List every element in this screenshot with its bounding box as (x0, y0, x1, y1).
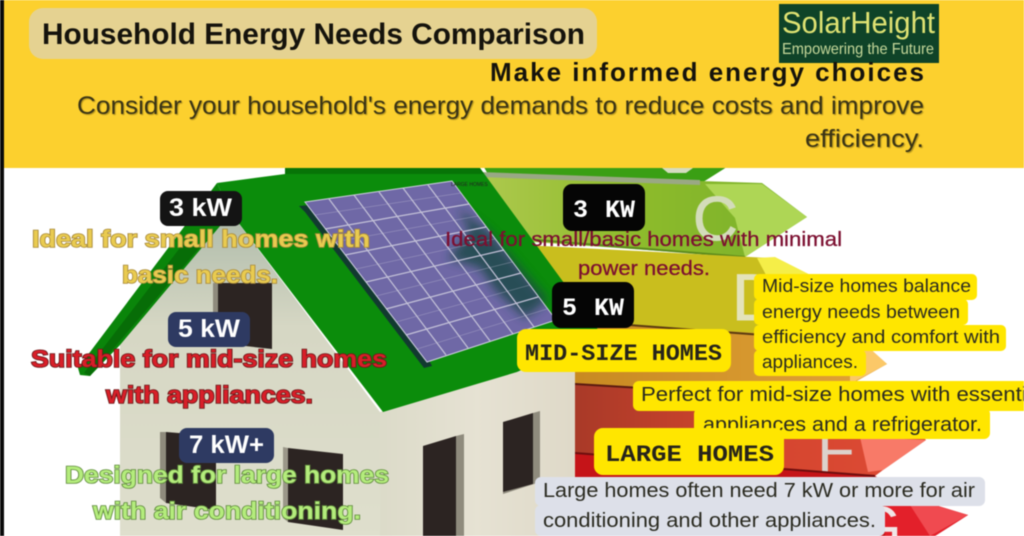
text: large homes: with air conditioning. (92, 498, 361, 525)
text: small/basic homes (445, 229, 842, 280)
badge: 3 kW (160, 191, 242, 226)
left black edge (0, 0, 4, 536)
side window (503, 411, 540, 494)
arrow F red-orange (575, 384, 926, 486)
energy rating arrows (480, 160, 968, 536)
left roof slope (78, 183, 231, 376)
lower left window (160, 432, 216, 510)
badge: 3 KW right (563, 184, 645, 231)
badge: 5 kW: 5 kW (178, 315, 240, 343)
arrow G red (575, 453, 968, 536)
callout: mid-size balance: efficiency and comfort with (762, 327, 1000, 347)
arrow B dark green (480, 160, 738, 184)
callout: mid-size balance: appliances. (762, 352, 858, 372)
callout: essential appliances: Perfect for mid-size homes with essential (641, 383, 1024, 406)
arrow D yellow (505, 244, 850, 337)
header description: Consider your household's energy demands to reduce costs and improve (77, 92, 924, 120)
block: 5 kW left (31, 312, 387, 409)
text: small/basic homes: power needs. (578, 258, 710, 280)
title (29, 8, 597, 59)
badge: 5 KW right (552, 282, 634, 328)
arrow C green: C (693, 185, 738, 254)
arrow D yellow: D (732, 260, 780, 334)
label: large homes (594, 428, 784, 475)
logo: Empowering the Future (782, 41, 934, 58)
panel reflection (448, 208, 548, 318)
callout: large homes need: Large homes often need 7 kW or more for air (543, 479, 975, 502)
tiny panel label: LARGE HOMES (451, 182, 488, 188)
callout: large homes need (535, 477, 985, 536)
text: mid-size homes (31, 346, 387, 409)
block: 3 kW left (32, 191, 370, 289)
header description: efficiency. (805, 125, 924, 153)
house illustration (78, 168, 602, 536)
arrow F red-orange: F (817, 417, 855, 486)
logo: SolarHeight (782, 5, 935, 40)
header band (0, 0, 1024, 168)
arrow C green (480, 172, 807, 257)
callout: mid-size balance (754, 274, 1006, 376)
text: mid-size homes: Suitable for mid-size homes (31, 346, 387, 373)
callout: mid-size balance: energy needs between (762, 302, 960, 322)
text: small/basic homes: Ideal for small/basic homes with minimal (445, 229, 842, 251)
badge: 7 kW+: 7 kW+ (189, 431, 264, 459)
label: mid-size homes: MID-SIZE HOMES (525, 341, 722, 367)
arrow E orange (575, 321, 887, 400)
text: large homes: Designed for large homes (65, 462, 389, 489)
solar panel (299, 181, 556, 368)
badge: 3 KW right: KW (605, 196, 635, 225)
side wall (380, 352, 575, 536)
top window (213, 283, 272, 349)
front wall (120, 213, 380, 536)
callout: mid-size balance: Mid-size homes balance (762, 276, 971, 296)
subheading: Make informed energy choices (490, 57, 924, 87)
text: small homes (32, 226, 370, 289)
text: large homes (65, 462, 389, 525)
badge: 7 kW+ (179, 428, 274, 463)
block: 7 kW left (65, 428, 389, 525)
badge: 3 kW: 3 kW (169, 194, 232, 222)
callout: essential appliances (633, 381, 1024, 439)
lower right window (283, 447, 343, 530)
text: small homes: Ideal for small homes with (32, 226, 370, 253)
label: large homes: LARGE HOMES (605, 442, 774, 468)
badge: 5 KW right: KW (594, 294, 624, 323)
badge: 3 KW right: 3 (573, 196, 588, 225)
callout: large homes need: conditioning and other appliances. (543, 509, 876, 532)
label: mid-size homes (517, 329, 731, 372)
main roof (217, 168, 602, 412)
text: small homes: basic needs. (122, 262, 278, 289)
text: mid-size homes: with appliances. (105, 382, 313, 409)
header description (77, 92, 924, 153)
door (423, 434, 464, 536)
logo (779, 4, 939, 63)
badge: 5 KW right: 5 (562, 294, 577, 323)
title: Household Energy Needs Comparison (42, 18, 585, 51)
callout: essential appliances: appliances and a refrigerator. (703, 413, 982, 436)
badge: 5 kW (168, 312, 250, 347)
